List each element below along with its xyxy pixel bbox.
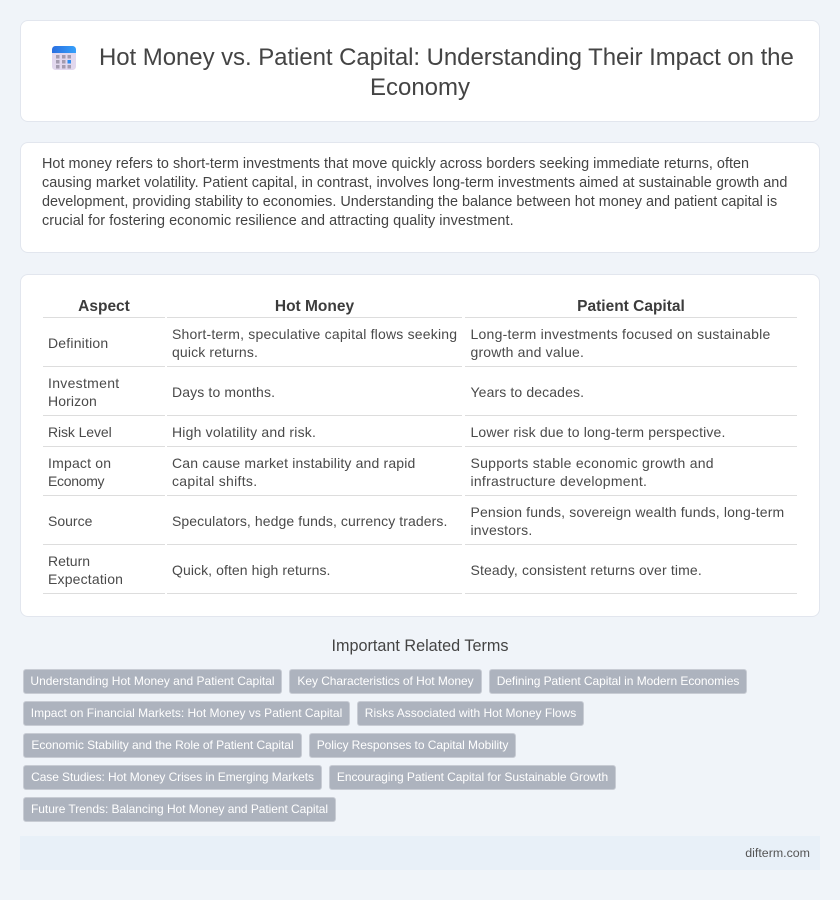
row: definition: Long-term investments focused on sustainable <box>470 326 771 342</box>
row: impact on economy: Economy <box>48 473 104 489</box>
row: definition: growth and value. <box>470 344 584 360</box>
tag <box>309 733 516 758</box>
intro paragraph: causing market volatility. Patient capital, in contrast, involves long-term investments aimed at sustainable growth and <box>42 175 787 191</box>
table header <box>78 298 685 315</box>
row: return expectation: Return <box>48 553 90 569</box>
row: return expectation: Steady, consistent returns over time. <box>470 562 702 578</box>
row: investment horizon: Years to decades. <box>470 384 584 400</box>
tag <box>23 669 282 694</box>
tag: Risks Associated with Hot Money Flows <box>365 706 576 720</box>
row: impact on economy: Can cause market instability and rapid <box>172 455 415 471</box>
tag: Encouraging Patient Capital for Sustainable Growth <box>337 770 608 784</box>
heading: important related terms: Important Related Terms <box>332 637 508 655</box>
row: investment horizon: Days to months. <box>172 384 275 400</box>
related terms tags <box>23 669 747 822</box>
row: impact on economy: capital shifts. <box>172 473 257 489</box>
footer brand text: difterm.com <box>745 846 810 860</box>
table header: Patient Capital <box>577 298 685 315</box>
tag <box>329 765 616 790</box>
tag <box>23 765 322 790</box>
comparison table <box>43 298 797 594</box>
row: return expectation: Expectation <box>48 571 123 587</box>
row: impact on economy <box>48 455 714 489</box>
tag <box>357 701 584 726</box>
row: definition: quick returns. <box>172 344 258 360</box>
row: definition: Definition <box>48 335 108 351</box>
title: Economy <box>370 74 470 101</box>
row: source: Pension funds, sovereign wealth funds, long-term <box>470 504 784 520</box>
tag: Understanding Hot Money and Patient Capital <box>30 674 275 688</box>
panel: title card <box>20 20 820 122</box>
row: source <box>48 504 784 538</box>
row: risk level: High volatility and risk. <box>172 424 316 440</box>
row: risk level: Lower risk due to long-term perspective. <box>470 424 726 440</box>
row: investment horizon: Horizon <box>48 393 97 409</box>
row: definition: Short-term, speculative capital flows seeking <box>172 326 457 342</box>
row: return expectation <box>48 553 702 587</box>
title <box>99 44 794 101</box>
row: risk level <box>48 424 726 440</box>
table header: Hot Money <box>275 298 354 315</box>
intro paragraph: development, providing stability to economies. Understanding the balance between hot money and patient capital is <box>42 194 777 210</box>
panel: intro card <box>20 142 820 253</box>
table header: Aspect <box>78 298 130 315</box>
row: source: Speculators, hedge funds, currency traders. <box>172 513 447 529</box>
tag <box>23 733 302 758</box>
tag: Case Studies: Hot Money Crises in Emerging Markets <box>31 770 314 784</box>
tag <box>489 669 747 694</box>
row: impact on economy: infrastructure development. <box>470 473 647 489</box>
row: risk level: Risk Level <box>48 424 112 440</box>
intro paragraph <box>42 156 787 229</box>
tag <box>23 701 350 726</box>
row: source: investors. <box>470 522 532 538</box>
row: investment horizon: Investment <box>48 375 119 391</box>
footer bar <box>20 836 820 870</box>
tag <box>23 797 336 822</box>
panel: comparison table card <box>20 274 820 617</box>
row: impact on economy: Impact on <box>48 455 111 471</box>
row: investment horizon <box>48 375 584 409</box>
tag: Policy Responses to Capital Mobility <box>317 738 508 752</box>
row: definition <box>48 326 771 360</box>
tag: Economic Stability and the Role of Patient Capital <box>31 738 294 752</box>
tag: Future Trends: Balancing Hot Money and Patient Capital <box>31 802 328 816</box>
row: impact on economy: Supports stable economic growth and <box>470 455 714 471</box>
icon: calendar <box>52 46 76 70</box>
row: source: Source <box>48 513 92 529</box>
tag: Impact on Financial Markets: Hot Money vs Patient Capital <box>31 706 342 720</box>
intro paragraph: Hot money refers to short-term investments that move quickly across borders seeking immediate returns, often <box>42 156 749 172</box>
title: Hot Money vs. Patient Capital: Understanding Their Impact on the <box>99 44 794 71</box>
tag: Key Characteristics of Hot Money <box>297 674 474 688</box>
tag: Defining Patient Capital in Modern Economies <box>497 674 739 688</box>
tag <box>289 669 482 694</box>
intro paragraph: crucial for fostering economic resilience and attracting quality investment. <box>42 213 514 229</box>
row: return expectation: Quick, often high returns. <box>172 562 330 578</box>
